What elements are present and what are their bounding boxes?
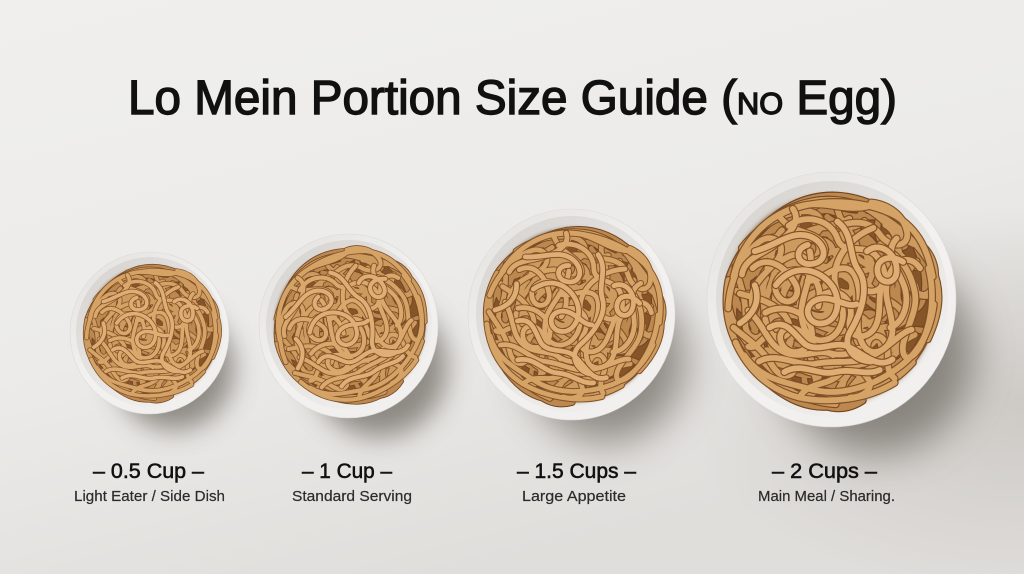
- amount: – 1.5 Cups –: [517, 460, 636, 483]
- use case: Standard Serving: [292, 488, 412, 505]
- label: 0.5 cup: [74, 460, 225, 505]
- noodles: [688, 157, 973, 441]
- noodles: [61, 242, 241, 422]
- label: 2 cups: [758, 460, 895, 505]
- bowl inner wall: [716, 181, 948, 417]
- amount: – 2 Cups –: [772, 460, 877, 483]
- bowl shadow: [526, 278, 686, 442]
- bowl rim: [468, 209, 675, 420]
- bowl rim: [259, 234, 438, 418]
- bowl rim: [70, 252, 229, 414]
- panel: 0.5 cup portion: [61, 242, 241, 430]
- amount: – 0.5 Cup –: [93, 460, 204, 483]
- panel: 1 cup portion: [214, 190, 485, 461]
- bowl shadow: [311, 297, 447, 437]
- bowl inner wall: [476, 216, 668, 412]
- panel: 1.5 cups portion: [424, 165, 722, 463]
- use case: Large Appetite: [522, 488, 626, 505]
- bowl inner wall: [76, 257, 224, 407]
- noodles: [214, 190, 485, 461]
- use case: Main Meal / Sharing.: [758, 488, 895, 505]
- panel: 2 cups portion: [688, 157, 974, 454]
- label: 1 cup: [292, 460, 412, 505]
- label: 1.5 cups: [517, 460, 636, 505]
- title: Lo Mein Portion Size Guide (NO Egg): [128, 72, 897, 125]
- bowl inner wall: [266, 240, 432, 410]
- noodles: [424, 165, 722, 463]
- bowl shadow: [114, 306, 234, 430]
- use case: Light Eater / Side Dish: [74, 488, 225, 505]
- bowl rim: [707, 172, 956, 427]
- amount: – 1 Cup –: [302, 460, 392, 483]
- bowl shadow: [778, 254, 974, 454]
